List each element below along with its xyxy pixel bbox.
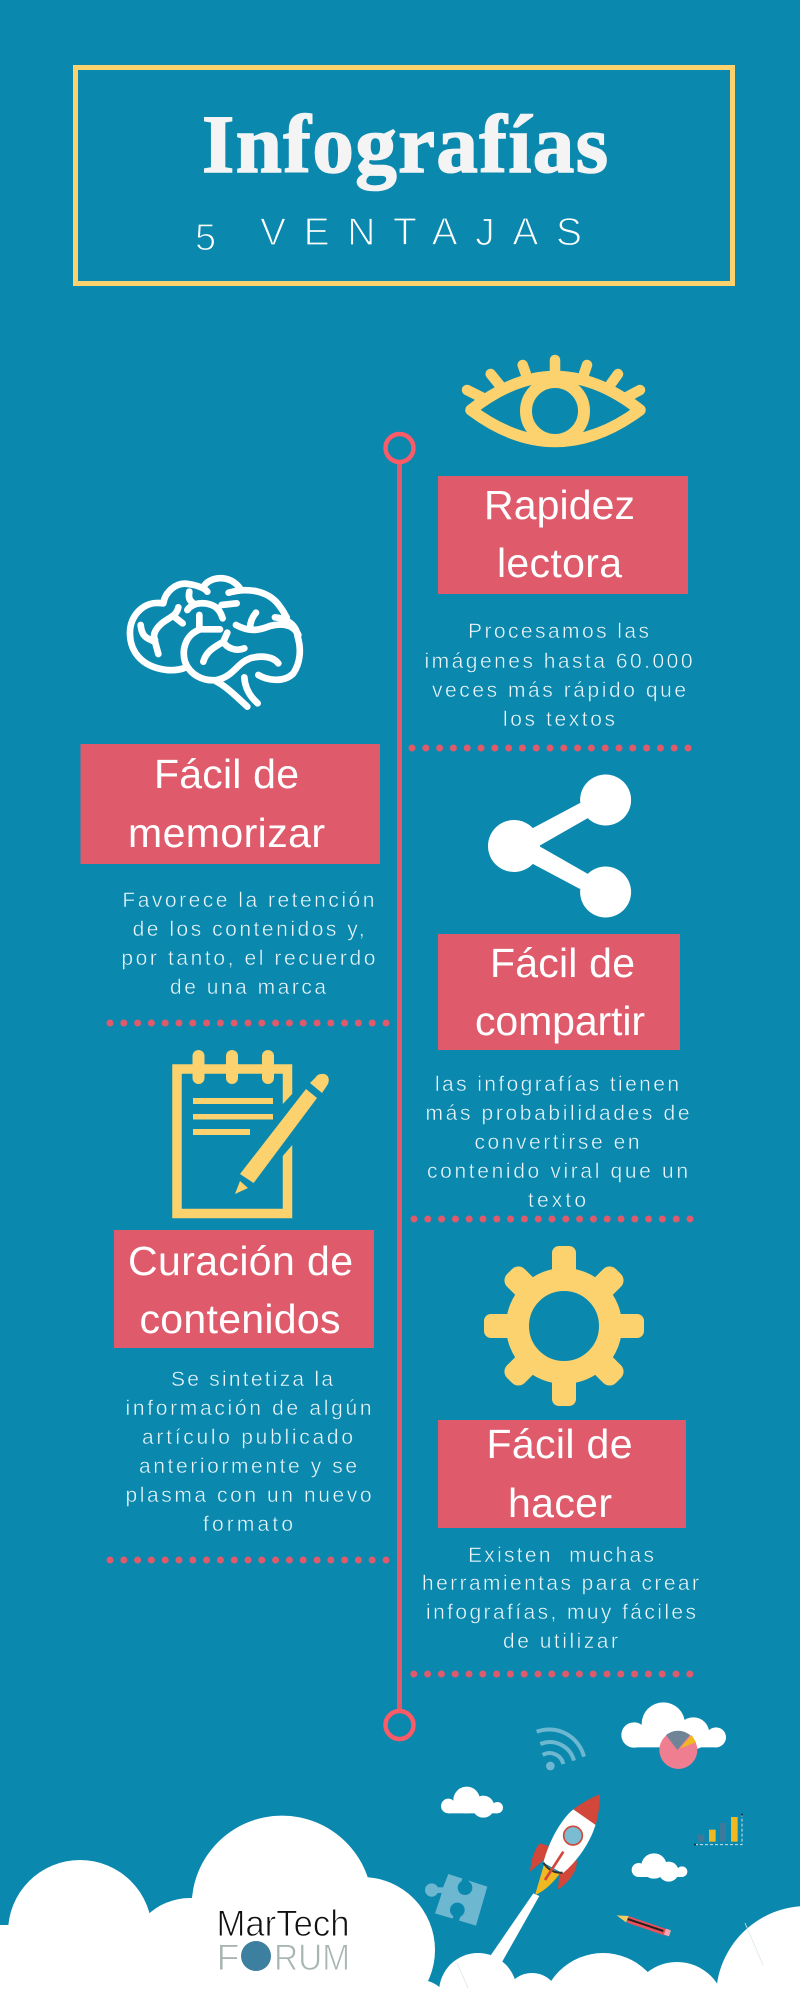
heading: Fácil de [154, 751, 299, 797]
text block: Procesamos las [468, 620, 649, 643]
text block: anteriormente y se [139, 1455, 357, 1478]
heading [486, 1421, 632, 1526]
text block [426, 1073, 690, 1212]
text block: formato [203, 1513, 293, 1536]
text block: contenido viral que un [427, 1160, 688, 1183]
heading: Fácil de [486, 1421, 632, 1467]
heading: compartir [475, 998, 645, 1044]
icon: gear [484, 1246, 644, 1406]
text block: convertirse en [474, 1131, 640, 1154]
text block [126, 1368, 372, 1536]
heading: hacer [508, 1480, 612, 1526]
text block: imágenes hasta 60.000 [424, 650, 692, 673]
heading: Fácil de [490, 940, 635, 986]
text block: infografías, muy fáciles [426, 1601, 696, 1624]
subtitle: 5 [195, 217, 216, 259]
icon: wifi [537, 1729, 584, 1770]
logo: MarTech Forum: MarTech [216, 1902, 350, 1944]
text block: Favorece la retención [122, 889, 374, 912]
logo: MarTech Forum: F [216, 1936, 239, 1978]
logo: MarTech Forum [216, 1902, 350, 1978]
panel: rapidez lectora [424, 476, 692, 731]
text block: de los contenidos y, [133, 918, 365, 941]
heading: Rapidez [484, 482, 635, 528]
icon: notepad and pencil [177, 1050, 329, 1214]
heading: contenidos [140, 1296, 340, 1342]
timeline [386, 434, 414, 1739]
text block: herramientas para crear [422, 1572, 699, 1595]
text block: Existen muchas [468, 1544, 654, 1567]
icon: brain [130, 578, 300, 707]
icon: share [488, 774, 631, 918]
icon: cloud with pie chart [621, 1702, 726, 1769]
panel: fácil de memorizar [80, 744, 380, 999]
logo: MarTech Forum: RUM [274, 1936, 350, 1978]
logo: MarTech Forum: O [242, 1936, 271, 1978]
text block: Se sintetiza la [171, 1368, 333, 1391]
heading [128, 1238, 353, 1342]
panel: fácil de compartir [426, 934, 690, 1212]
clouds: ground [0, 1816, 800, 2000]
panel: curación de contenidos [114, 1230, 374, 1536]
text block: las infografías tienen [435, 1073, 679, 1096]
text block [121, 889, 375, 999]
heading: memorizar [128, 810, 325, 856]
text block: por tanto, el recuerdo [121, 947, 375, 970]
heading: Curación de [128, 1238, 353, 1284]
text block [424, 620, 692, 731]
icon: bar chart [694, 1814, 743, 1846]
text block: los textos [503, 708, 615, 731]
title panel [76, 68, 732, 284]
text block: artículo publicado [142, 1426, 353, 1449]
icon: puzzle piece [425, 1874, 487, 1926]
subtitle: VENTAJAS [260, 211, 582, 254]
text block: plasma con un nuevo [126, 1484, 372, 1507]
text block: más probabilidades de [426, 1102, 690, 1125]
icon: rocket [530, 1794, 600, 1895]
panel: fácil de hacer [422, 1420, 699, 1653]
icon: rocket exhaust [491, 1893, 539, 1963]
text block: texto [528, 1189, 586, 1212]
icon: small cloud right [632, 1853, 687, 1882]
title: Infografías [202, 98, 608, 190]
heading: lectora [497, 540, 622, 586]
text block: información de algún [126, 1397, 372, 1420]
text block: veces más rápido que [432, 679, 686, 702]
bottom illustrations [425, 1702, 743, 1963]
icon: eye [467, 360, 640, 442]
heading [475, 940, 645, 1044]
text block: de utilizar [503, 1630, 618, 1653]
heading [128, 751, 325, 856]
icon: small cloud left [441, 1787, 503, 1818]
icon: pencil [617, 1915, 670, 1933]
heading [484, 482, 635, 586]
text block: de una marca [170, 976, 326, 999]
text block [422, 1544, 699, 1653]
